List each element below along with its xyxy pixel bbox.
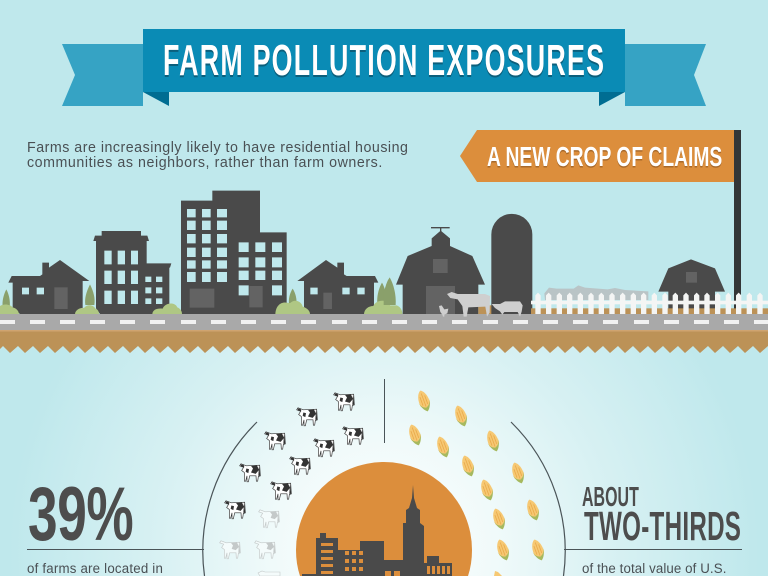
far tree and bush — [383, 277, 402, 314]
about: ABOUT — [582, 482, 639, 512]
sign board — [460, 130, 734, 182]
chicken — [439, 305, 448, 317]
title ribbon — [62, 29, 706, 106]
silo — [491, 214, 532, 314]
ribbon folds — [143, 92, 625, 106]
right statistic: about two-thirds — [564, 482, 742, 576]
house 2 — [297, 260, 378, 314]
signpost: a new crop of claims — [460, 130, 741, 314]
farm scene — [383, 214, 768, 314]
sign shadow text: A NEW CROP OF CLAIMS — [487, 144, 722, 174]
city skyline — [302, 485, 452, 576]
office tower — [181, 191, 287, 314]
bushes — [0, 301, 390, 314]
center vertical divider — [384, 379, 385, 443]
caption: of the total value of U.S. — [582, 561, 726, 576]
fence soil strip — [531, 308, 768, 314]
outer arc — [203, 422, 565, 576]
ribbon body — [143, 29, 625, 92]
sign text: A NEW CROP OF CLAIMS — [487, 143, 722, 173]
small barn — [658, 259, 725, 314]
cow field — [220, 393, 363, 576]
corn field — [406, 389, 547, 576]
two-thirds: TWO-THIRDS — [584, 505, 741, 550]
white picket fence — [531, 293, 768, 314]
left statistic: 39% — [27, 472, 204, 576]
apartment building — [93, 231, 171, 314]
cow — [447, 292, 490, 317]
rule — [564, 549, 742, 550]
rule — [27, 549, 204, 550]
ribbon right tail — [625, 44, 706, 106]
barn — [396, 227, 492, 314]
intro text: Farms are increasingly likely to have residential housing — [27, 140, 408, 156]
ribbon left tail — [62, 44, 143, 106]
sign post — [734, 130, 741, 314]
ground soil — [0, 330, 768, 353]
road — [0, 314, 768, 332]
trees — [2, 279, 393, 307]
title: FARM POLLUTION EXPOSURES — [163, 35, 604, 85]
house 1 — [8, 260, 89, 314]
title shadow: FARM POLLUTION EXPOSURES — [163, 37, 604, 87]
big number: 39% — [28, 472, 134, 556]
intro text: communities as neighbors, rather than farm owners. — [27, 155, 382, 171]
distant cows — [544, 285, 648, 300]
pig — [492, 301, 523, 317]
residential skyline — [0, 191, 393, 314]
city circle — [296, 462, 472, 576]
farm animals — [439, 292, 523, 317]
orange disc — [296, 462, 472, 576]
caption: of farms are located in — [27, 561, 163, 576]
black cows — [225, 393, 363, 519]
faded cows — [220, 510, 280, 576]
